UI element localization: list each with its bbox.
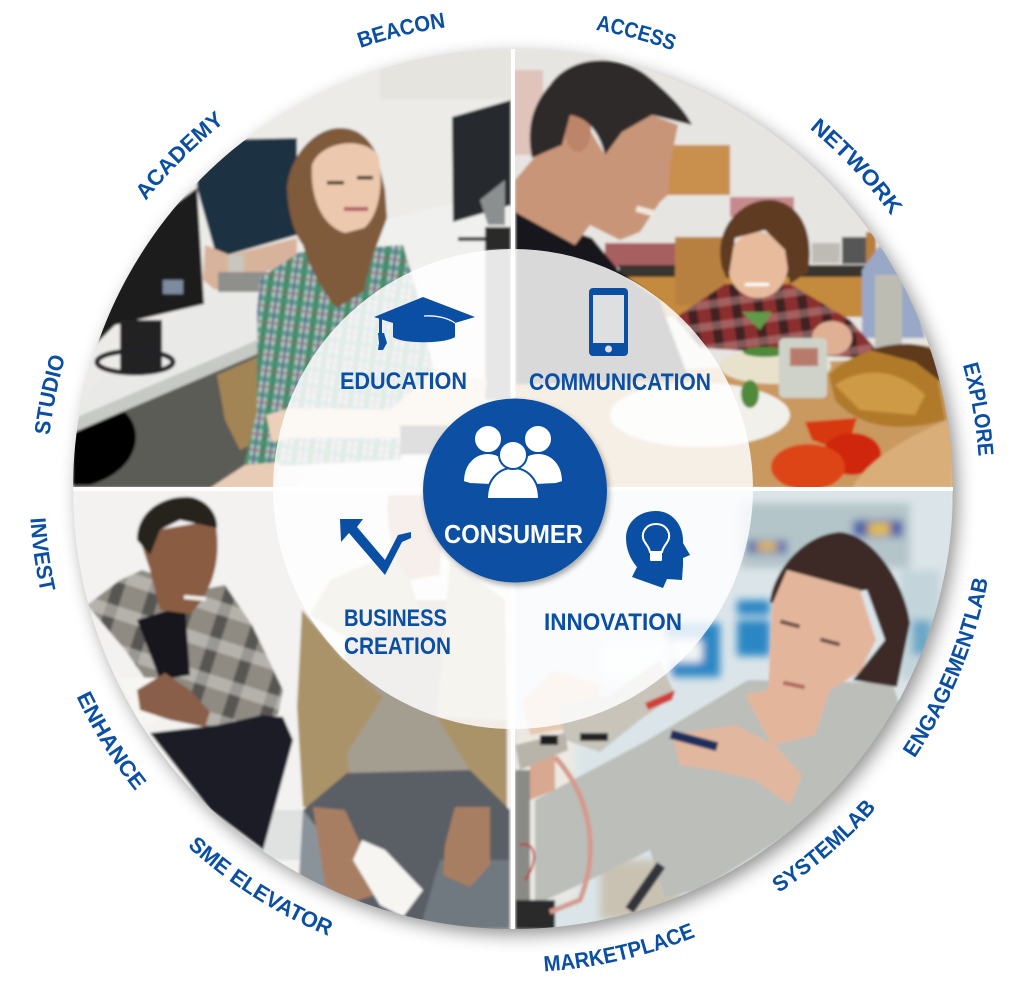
label: enhance: ENHANCE [77, 691, 147, 790]
label: sme elevator: SME ELEVATOR [190, 838, 332, 936]
shirt [535, 680, 905, 905]
boy hair [720, 200, 810, 284]
man hair [530, 60, 692, 158]
chair [217, 355, 262, 450]
panel: innovation photo [513, 489, 953, 929]
screwdriver [670, 730, 718, 751]
jeans [303, 770, 510, 929]
heading: business creation: CREATION [344, 633, 451, 660]
heading: business creation [344, 605, 451, 660]
icon: head with lightbulb [626, 511, 690, 588]
ear [565, 108, 591, 152]
table [515, 355, 953, 488]
woman shirt [243, 245, 440, 468]
heading: consumer: CONSUMER [444, 519, 583, 549]
panel: communication photo [513, 49, 953, 490]
panel: education photo [73, 49, 513, 489]
arm [266, 375, 487, 442]
panel: business creation photo [73, 489, 513, 929]
divider lines [73, 49, 953, 929]
hand [672, 725, 802, 805]
label: network: NETWORK [810, 118, 903, 216]
right man face [387, 495, 445, 580]
icon: group of people [463, 425, 563, 499]
plates [719, 348, 831, 384]
right man tee [345, 600, 470, 780]
hand [137, 673, 210, 727]
label: beacon: BEACON [357, 12, 444, 48]
pants [150, 715, 293, 850]
hands [313, 807, 375, 903]
heading: education: EDUCATION [340, 368, 467, 395]
left man shirt [87, 570, 283, 730]
desk [79, 410, 89, 418]
label: marketplace: MARKETPLACE [544, 923, 695, 972]
man shirt [515, 212, 690, 385]
right man jacket [297, 610, 383, 807]
label: access: ACCESS [596, 16, 676, 50]
icon: graduation cap [374, 297, 475, 350]
monitor right [452, 100, 511, 222]
label: explore: EXPLORE [963, 362, 994, 456]
center translucent circle [273, 249, 753, 729]
consumer hub [423, 398, 607, 582]
boy shirt [675, 284, 877, 358]
man [197, 138, 297, 258]
disc shadow [74, 50, 952, 928]
label: engagementlab: ENGAGEMENTLAB [902, 578, 987, 758]
left man head [140, 520, 218, 614]
chicken [829, 345, 945, 427]
monitor left [95, 188, 204, 345]
robot gripper [558, 660, 675, 752]
desk under area [73, 350, 262, 488]
face [312, 143, 381, 233]
papers [353, 840, 423, 917]
hair [770, 532, 910, 687]
hair [287, 128, 387, 308]
bread [852, 418, 953, 488]
heading: business creation: BUSINESS [344, 605, 447, 632]
face and neck [745, 570, 876, 745]
heading: innovation: INNOVATION [544, 609, 682, 636]
man face [515, 115, 678, 245]
heading: communication: COMMUNICATION [529, 369, 711, 396]
icon: smartphone [589, 288, 628, 356]
label: studio: STUDIO [35, 356, 64, 434]
label: academy: ACADEMY [138, 110, 220, 200]
icon: arrows business [340, 519, 411, 575]
label: systemlab: SYSTEMLAB [772, 800, 874, 891]
cup [144, 676, 158, 685]
label: invest: INVEST [30, 518, 56, 590]
boy face [728, 232, 788, 298]
other hand [522, 670, 602, 735]
tomatoes [805, 418, 857, 445]
